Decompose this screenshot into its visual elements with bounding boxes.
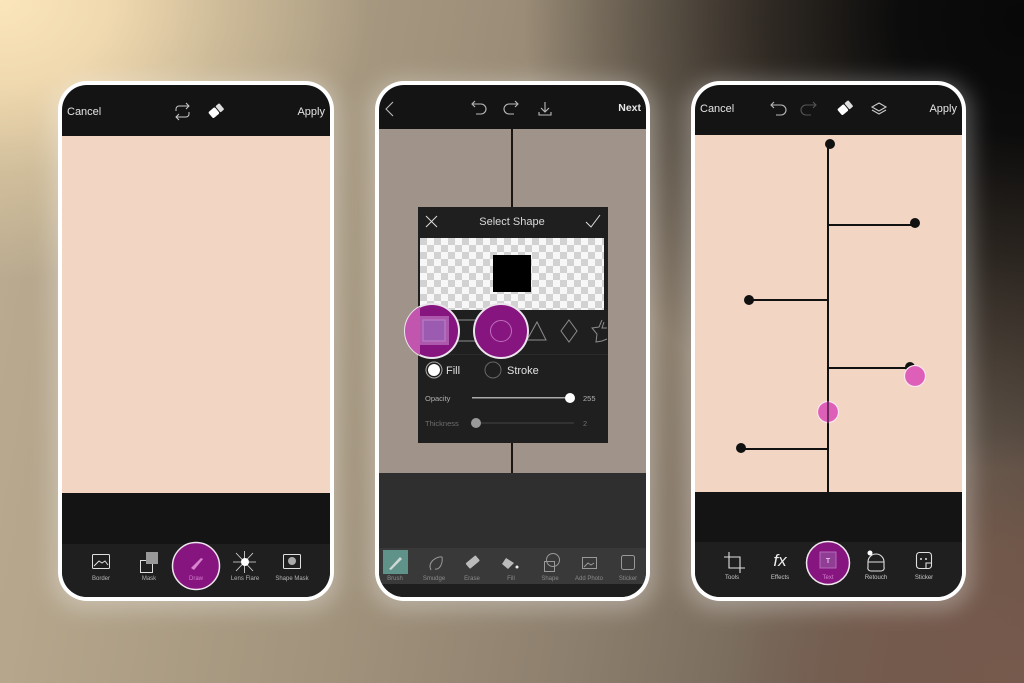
header icons <box>771 102 886 115</box>
icon: repeat <box>176 103 189 120</box>
phone 1: border tool: Mask <box>142 576 157 582</box>
shape options <box>455 320 607 342</box>
toolbar: Brush <box>387 576 403 582</box>
toolbar: Shape <box>541 576 559 582</box>
toolbar: Smudge <box>423 576 446 582</box>
fill / stroke radios: Stroke <box>507 365 539 377</box>
header icons <box>386 101 551 116</box>
toolbar: Sticker <box>619 576 637 582</box>
pink markers <box>904 366 926 386</box>
opacity slider: Opacity <box>425 394 451 403</box>
highlight: Text: T <box>826 558 831 565</box>
dialog: select shape <box>405 207 608 443</box>
toolbar icons and labels <box>92 551 300 573</box>
phone 3: timeline: Effects <box>771 575 789 581</box>
label: Next: Next <box>618 102 641 114</box>
phone 3: timeline <box>691 81 966 601</box>
header labels <box>67 106 325 118</box>
header labels <box>700 103 957 115</box>
header labels: Apply <box>297 106 325 118</box>
phone 2: select shape <box>375 81 650 601</box>
highlight: Draw <box>172 542 220 590</box>
phone 1: border tool <box>58 81 334 601</box>
highlight: Draw: Draw <box>189 576 204 582</box>
fill / stroke radios <box>426 362 539 378</box>
phone 1: border tool: Border <box>92 576 110 582</box>
canvas: peach <box>62 136 330 493</box>
header labels: Cancel <box>700 103 734 115</box>
toolbar icons <box>724 552 932 573</box>
phone 1: border tool: Shape Mask <box>275 576 310 582</box>
highlight: circle <box>474 304 528 358</box>
toolbar: Fill <box>507 576 515 582</box>
timeline line behind dialog <box>511 129 513 473</box>
fill / stroke radios: Fill <box>446 365 460 377</box>
toolbar <box>383 550 637 582</box>
timeline drawing <box>736 139 926 492</box>
phone 1: border tool: Lens Flare <box>231 576 260 582</box>
highlight: Text: Text <box>822 575 834 581</box>
header labels: Cancel <box>67 106 101 118</box>
phone 3: timeline: Sticker <box>915 575 933 581</box>
highlight: Text <box>806 542 850 584</box>
opacity slider: 255 <box>583 394 596 403</box>
dialog title: Select Shape <box>479 216 545 228</box>
highlight: square <box>405 304 459 358</box>
phone 3: timeline: Tools <box>725 575 739 581</box>
icon: eraser <box>208 103 224 119</box>
phone glow <box>52 80 972 610</box>
toolbar: Erase <box>464 576 480 582</box>
thickness slider <box>425 418 587 428</box>
header labels: Apply <box>929 103 957 115</box>
opacity slider <box>425 393 596 403</box>
thickness slider: 2 <box>583 419 587 428</box>
toolbar: Add Photo <box>575 576 604 582</box>
phone 3: timeline: Retouch <box>865 575 887 581</box>
preview: checkerboard <box>420 238 604 310</box>
thickness slider: Thickness <box>425 419 459 428</box>
phone 3: timeline: fx <box>773 551 787 570</box>
